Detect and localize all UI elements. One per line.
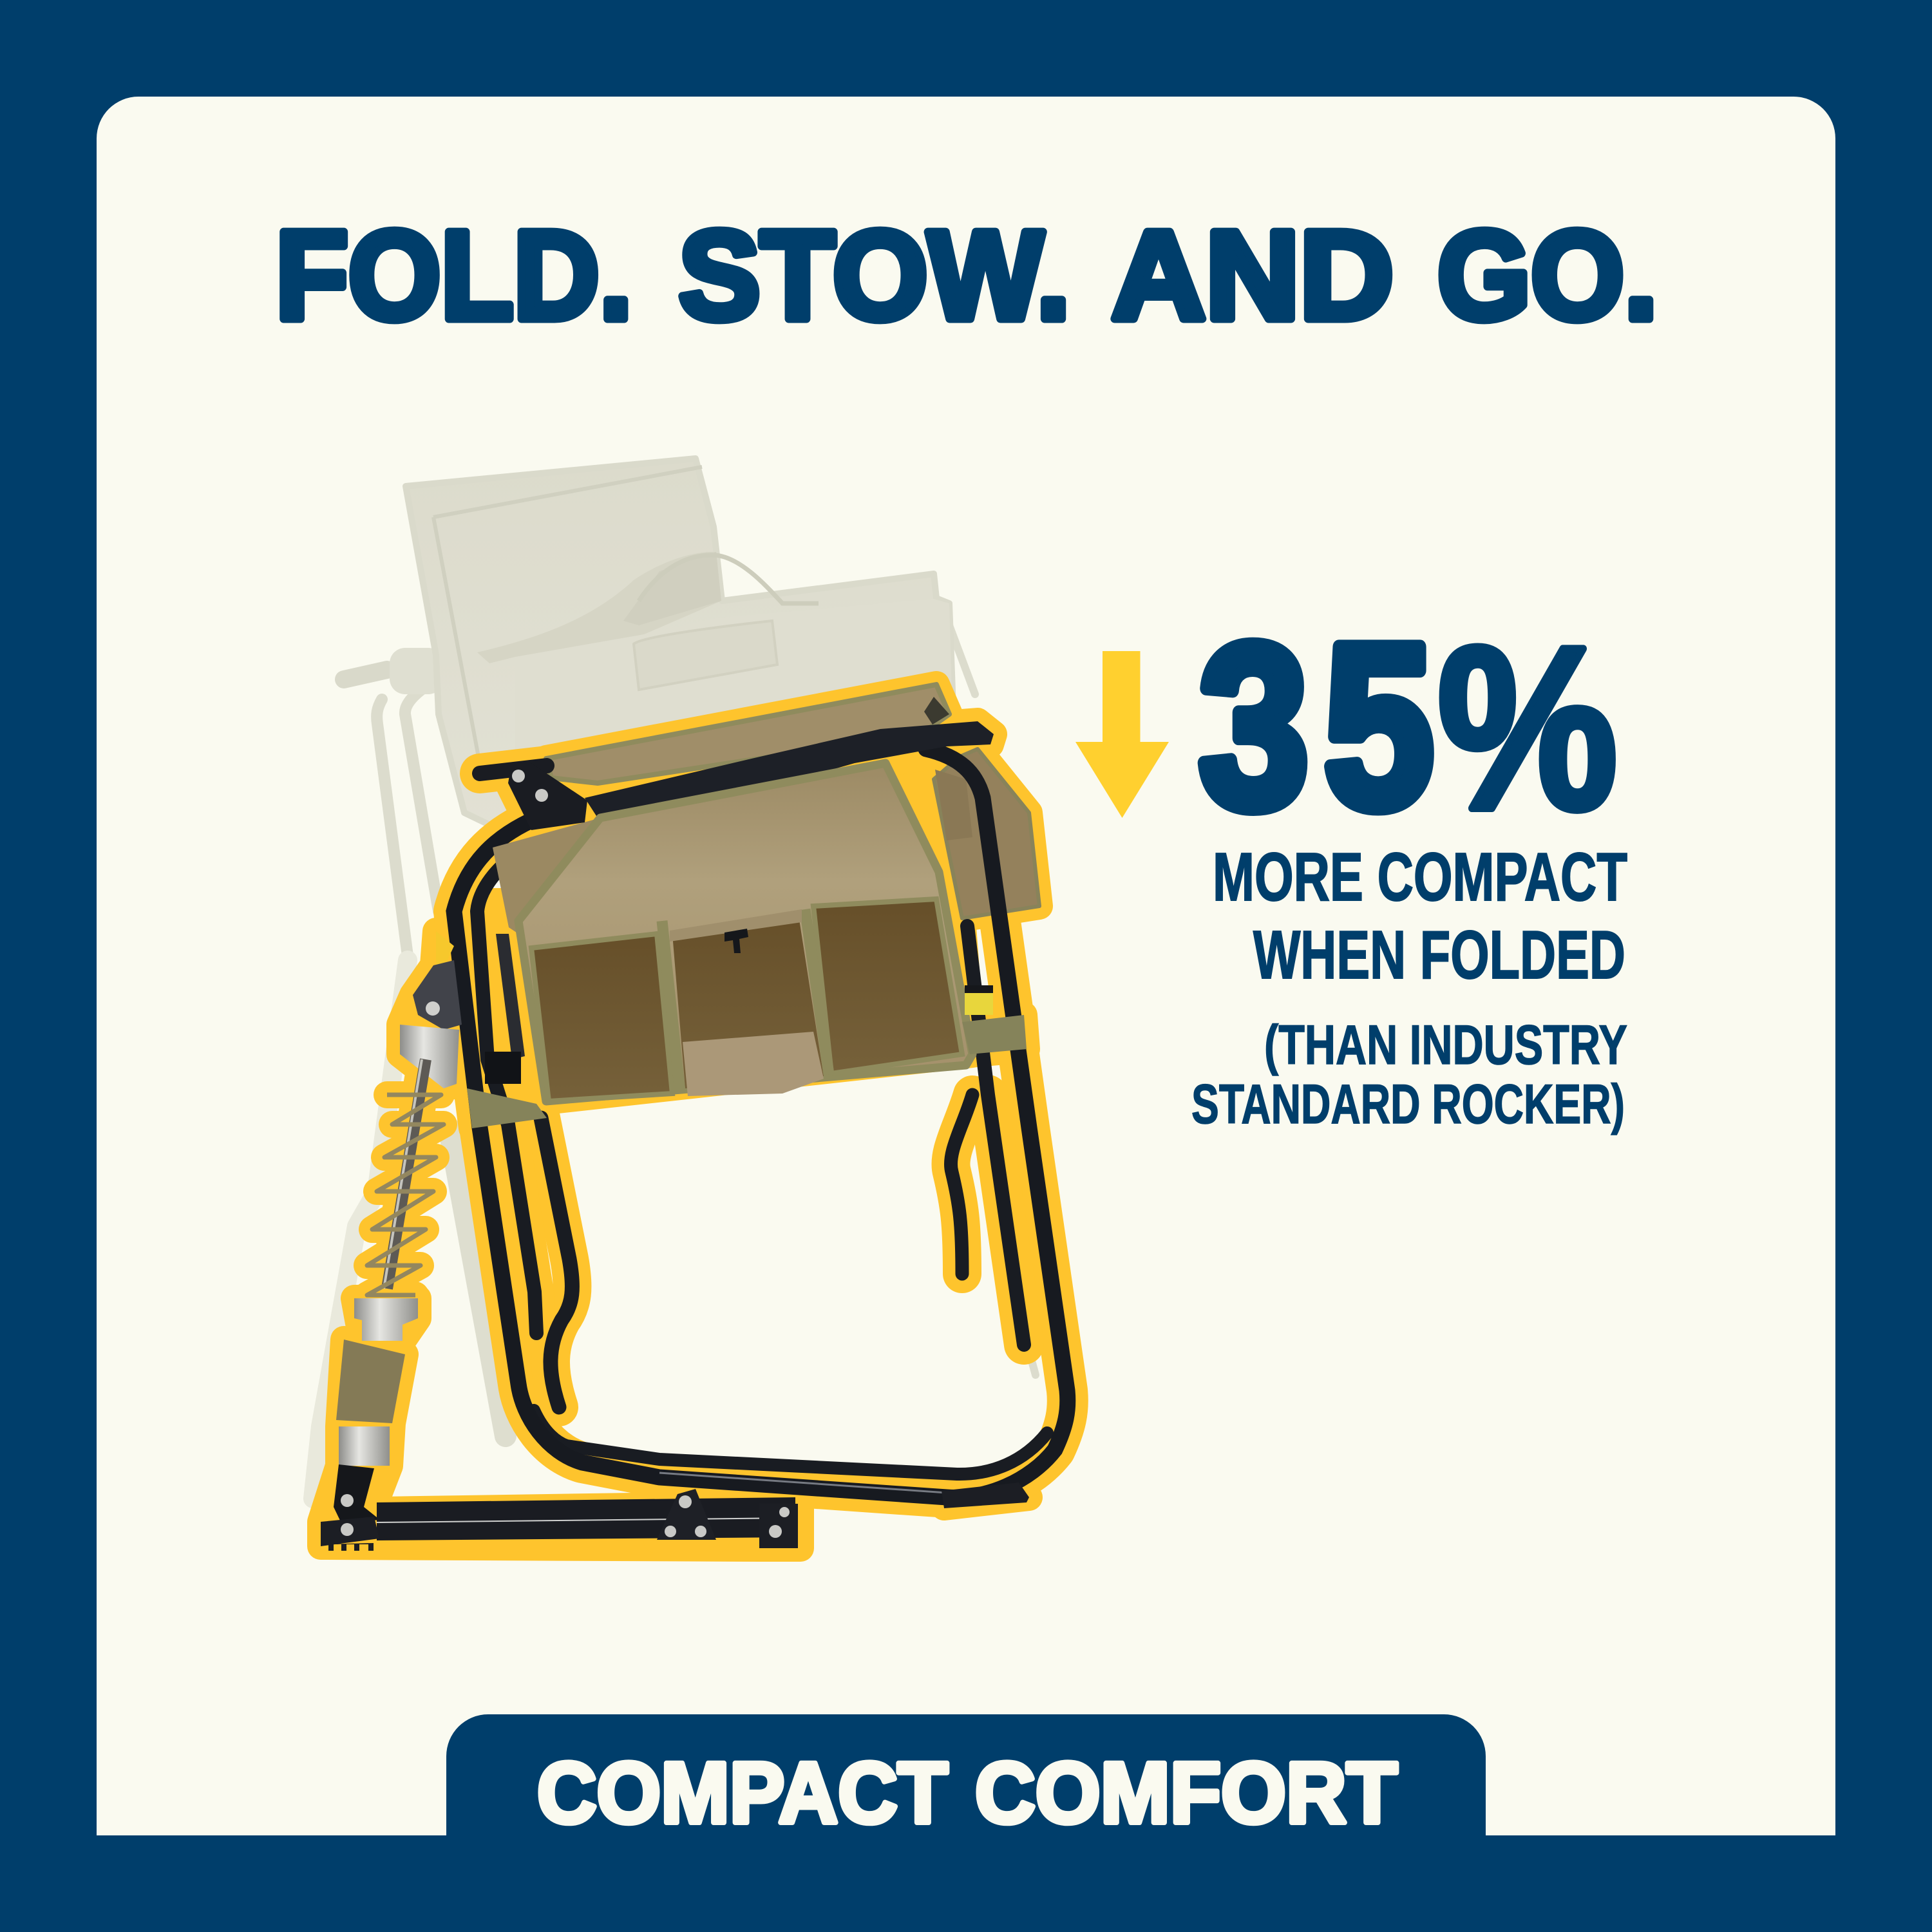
ghost pocket shade [623,552,721,625]
caption: comparison note [1191,1014,1627,1135]
left base foot [321,1517,379,1546]
ghost seat back fabric [406,459,953,837]
tube highlight [659,1473,947,1493]
olive sleeve [336,1340,405,1423]
left canvas edge [493,818,600,953]
tab label [537,1745,1397,1841]
silver coupler [354,1298,418,1341]
tab label: COMPACT [537,1745,948,1841]
rod [387,1059,426,1289]
rear frame tubes [477,852,1047,1474]
black link [334,1464,380,1523]
title: AND [1112,205,1394,346]
caption: more compact: WHEN FOLDED [1253,917,1625,993]
back canvas flap [934,749,1039,918]
grey pivot cap [413,960,462,1030]
hinge pin [480,766,547,773]
ghosted unfolded chair behind [313,459,1036,1499]
title [276,205,1658,346]
35% figure: % [1437,599,1618,858]
small tan pocket [683,1032,824,1096]
armrest [585,721,994,820]
flap strap [935,770,972,840]
right rubber foot pad [942,1482,1029,1508]
ghost chair frame tubes [313,625,1036,1499]
left mesh pocket [531,934,672,1101]
spring coils [367,1095,444,1295]
olive straps [467,1088,547,1128]
ghost lower panel shade [515,599,952,824]
right base foot [759,1504,798,1548]
folded chair [321,685,1068,1551]
ghost fold shading [477,552,721,663]
ghost flap [634,621,777,690]
folded chair yellow outline [321,685,1068,1548]
35% figure: 5 [1324,597,1434,856]
lower silver collar [339,1426,390,1466]
title: FOLD. [276,205,632,346]
mechanism backing [473,914,541,1095]
centre bracket [657,1489,716,1540]
middle mesh pocket [672,911,824,1088]
title: STOW. [679,205,1070,346]
35% figure [1199,597,1618,858]
caption: more compact [1213,839,1627,993]
down arrow [1075,651,1169,818]
35% figure: 3 [1199,597,1309,856]
caption: comparison note: (THAN INDUSTRY [1264,1014,1627,1076]
caption: comparison note: STANDARD ROCKER) [1191,1074,1625,1135]
caption: more compact: MORE COMPACT [1213,839,1627,915]
yellow lever [436,931,454,968]
base bars [377,1497,795,1540]
ghost handle loop [639,555,819,603]
ghost arm block [390,648,444,694]
main frame tube [454,749,1068,1498]
seat shadow corner [924,697,949,724]
title: GO. [1437,205,1658,346]
folding mechanism [496,934,525,1059]
right mesh pocket [813,899,962,1074]
bag panel [518,763,972,1101]
folded seat behind [546,685,949,783]
pull cord band [670,909,802,942]
pocket dividers [662,909,829,1092]
hinge plate [508,763,587,830]
bottom tab [446,1714,1486,1835]
tab label: COMFORT [975,1745,1397,1841]
caution label [965,985,993,1015]
zipper pull [724,929,748,953]
metal spring cap [400,1025,459,1088]
ghost back upper panel seam [433,467,702,764]
